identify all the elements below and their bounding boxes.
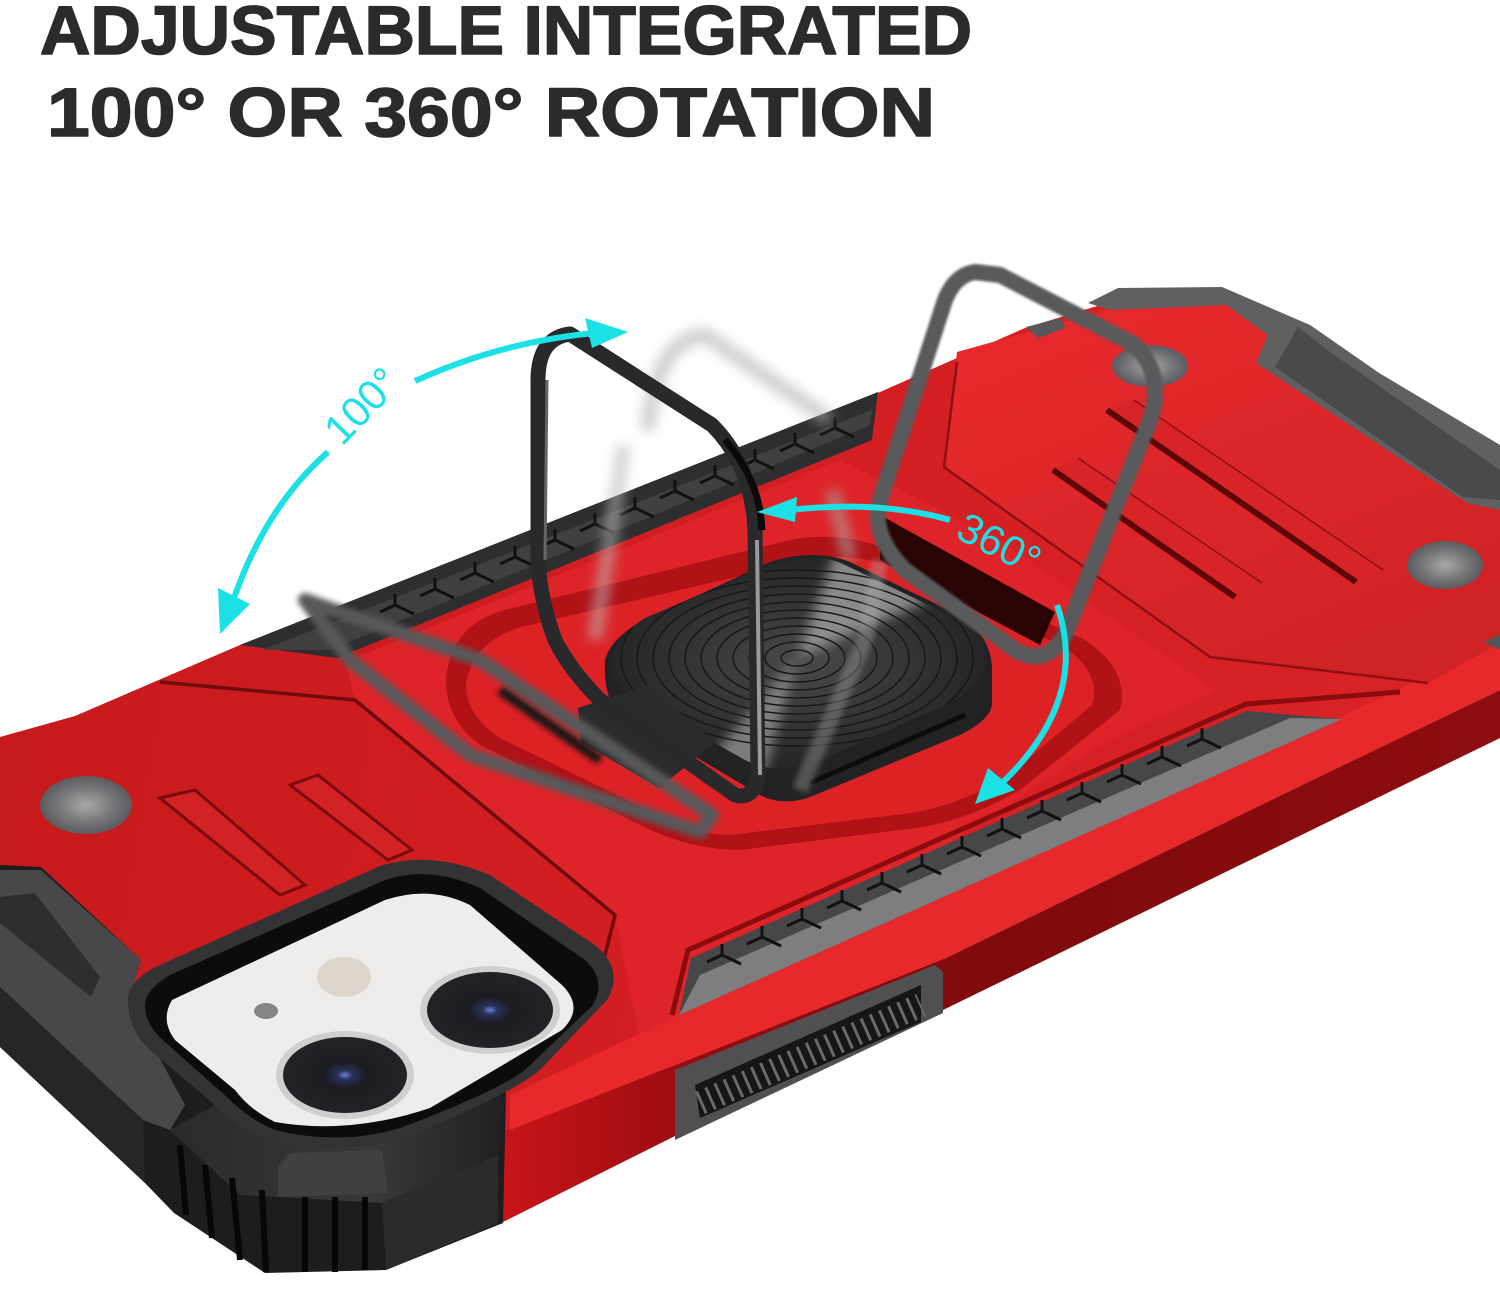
ring holder	[305, 272, 1155, 832]
maroon border around lower grip	[672, 692, 1400, 1015]
microphone	[254, 1003, 278, 1019]
phone case	[0, 287, 1500, 1273]
brushed metal disc	[611, 558, 986, 769]
ring recess	[446, 515, 1122, 850]
360 degree rotation arrow	[757, 497, 1066, 804]
small grey tab	[1026, 318, 1065, 338]
case top face	[0, 295, 1500, 1150]
flash	[317, 957, 371, 997]
lower grip strip	[679, 711, 1342, 1015]
ring upright position	[538, 334, 762, 796]
upper right slots	[1053, 400, 1383, 597]
right edge grey tab	[1484, 634, 1500, 650]
title	[40, 0, 972, 151]
camera module	[128, 860, 614, 1148]
motion-blur ring ghosts	[595, 335, 850, 640]
hinge	[578, 685, 716, 788]
left panel outline	[160, 682, 615, 975]
side button	[278, 1150, 388, 1197]
white camera island	[167, 894, 573, 1126]
bottom connector port	[675, 965, 943, 1140]
dark slot under ring	[880, 515, 1055, 645]
screw discs	[40, 345, 1483, 834]
upper right grey corner bumper	[1088, 287, 1500, 510]
upper right panel	[944, 305, 1500, 683]
square ring base	[605, 540, 992, 802]
lower bumper top	[170, 1090, 506, 1203]
lower lens	[276, 1031, 414, 1119]
bumper top surface	[0, 870, 185, 1130]
lower left bright surface	[345, 460, 1215, 1040]
case side wall	[503, 690, 1500, 1222]
100 degree rotation arrow	[218, 318, 628, 634]
lower left slots	[160, 775, 412, 895]
ghost over base	[800, 560, 880, 790]
bumper ribs	[180, 1145, 365, 1272]
ring tilted right position	[878, 272, 1155, 656]
bumper side	[0, 987, 145, 1183]
bright edge band	[510, 640, 1500, 1130]
black camera bumper corner	[0, 865, 506, 1273]
upper grip strip	[240, 392, 878, 658]
camera frame	[128, 860, 614, 1148]
label: 360°: 360°	[950, 503, 1049, 584]
bumper block	[382, 1155, 498, 1270]
label: 100°: 100°	[315, 358, 409, 453]
upper lens	[420, 966, 560, 1054]
ring flat position	[305, 600, 712, 832]
title: 100° OR 360° ROTATION	[47, 74, 935, 151]
